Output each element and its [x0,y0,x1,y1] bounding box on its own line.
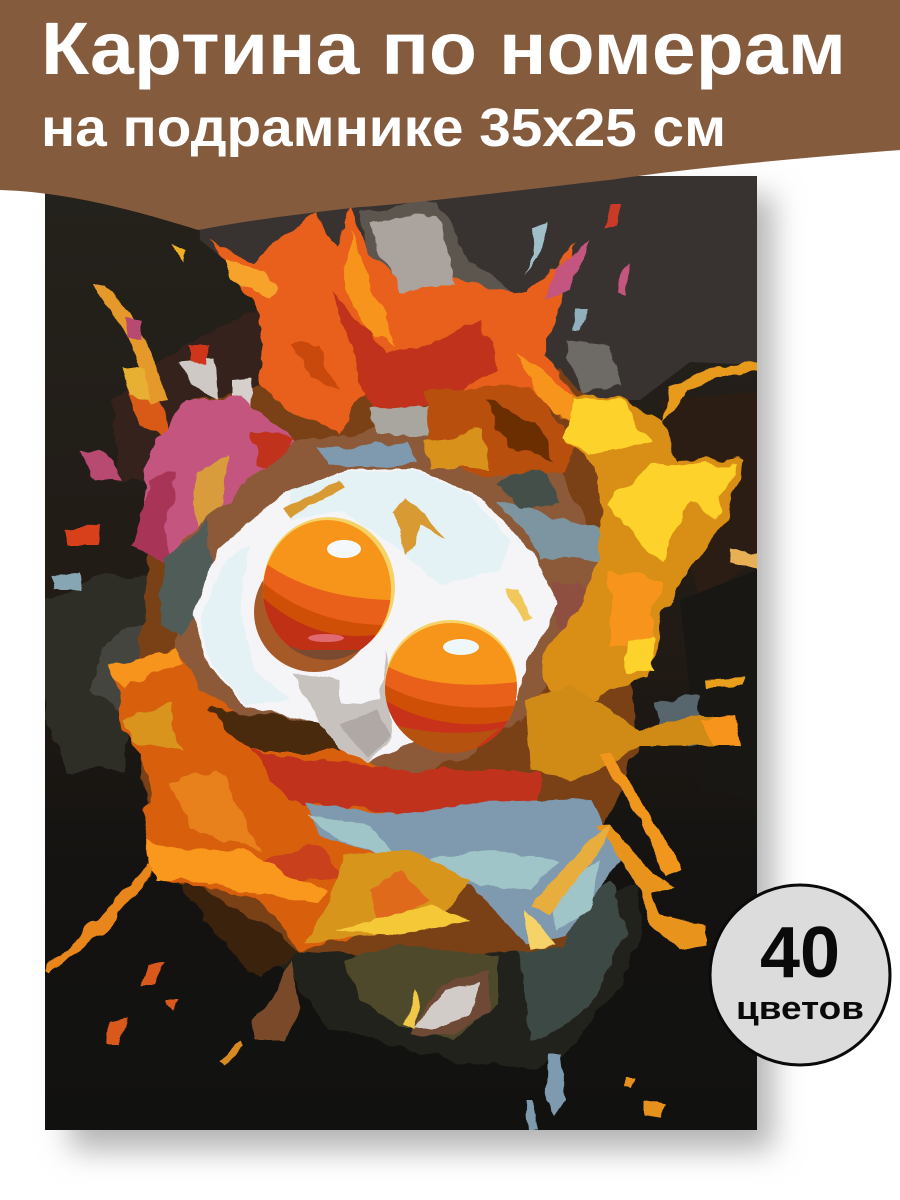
title: на подрамнике 35х25 см [41,98,726,158]
egg yolk right [385,620,517,753]
underpaint beneath the splash [130,370,640,960]
grey fragments by the pink splash [128,345,252,440]
yellow splash right [540,362,757,720]
yolk highlight left [327,540,361,558]
right-hand drips [525,685,740,950]
title [41,7,846,158]
egg yolk left [254,515,395,672]
scattered paint drops [52,205,745,1130]
badge: 40 colours [710,885,890,1065]
pink splash [80,395,300,570]
badge: 40 colours: 40 [760,913,840,993]
lower-left orange splash [45,648,540,972]
orange splash top [210,208,578,434]
canvas drop shadow [70,195,773,1150]
background tone patches [200,176,757,652]
egg white [193,468,557,762]
blue-grey lower splash [305,799,620,950]
painting background [45,176,757,1130]
banner background [0,0,900,230]
ring around egg [160,385,605,790]
grey smoke clouds [45,200,705,1070]
painting: fried eggs splash [45,176,757,1130]
dark olive patch [252,945,498,1040]
yolk highlight right [443,639,479,655]
title: Картина по номерам [41,7,846,90]
badge: 40 colours: цветов [736,990,864,1026]
